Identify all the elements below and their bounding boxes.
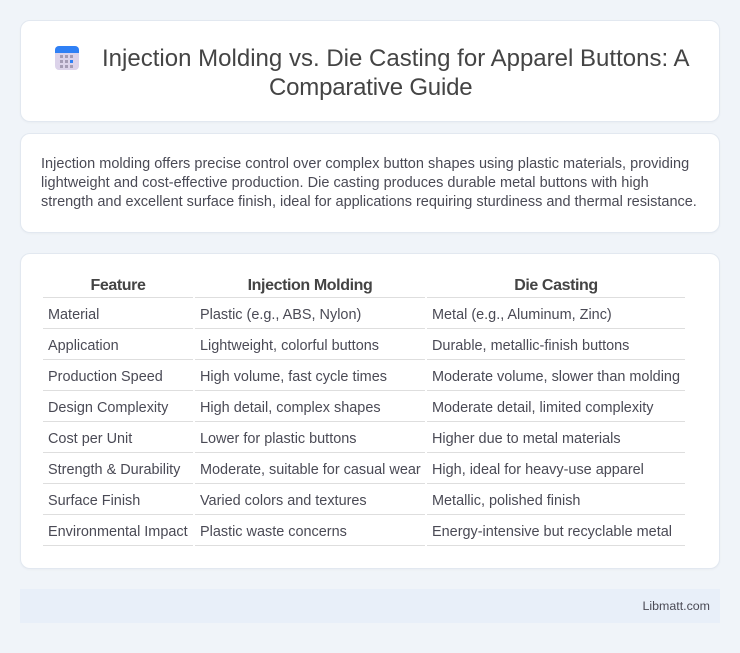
row: Surface Finish: [48, 493, 580, 509]
text: High volume, fast cycle times: [200, 369, 387, 385]
text: Moderate, suitable for casual wear: [200, 462, 421, 478]
intro text: [41, 156, 697, 210]
intro text: strength and excellent surface finish, ideal for applications requiring sturdiness and thermal resistance.: [41, 194, 697, 210]
text: Environmental Impact: [48, 524, 188, 540]
row: Design Complexity: [48, 400, 654, 416]
text: Metal (e.g., Aluminum, Zinc): [432, 307, 612, 323]
column header: Feature: Feature: [90, 277, 146, 294]
text: High detail, complex shapes: [200, 400, 381, 416]
icon: calendar: [55, 46, 79, 70]
text: Varied colors and textures: [200, 493, 367, 509]
row: Application: [48, 338, 629, 354]
text: Application: [48, 338, 119, 354]
text: High, ideal for heavy-use apparel: [432, 462, 644, 478]
text: Metallic, polished finish: [432, 493, 580, 509]
text: Moderate volume, slower than molding: [432, 369, 680, 385]
row: Production Speed: [48, 369, 680, 385]
text: Material: [48, 307, 99, 323]
text: Plastic (e.g., ABS, Nylon): [200, 307, 361, 323]
row: Environmental Impact: [48, 524, 672, 540]
text: Cost per Unit: [48, 431, 132, 447]
text: Strength & Durability: [48, 462, 180, 478]
text: Moderate detail, limited complexity: [432, 400, 653, 416]
text: Production Speed: [48, 369, 163, 385]
panel: intro card: [20, 133, 720, 233]
column header: Die Casting: Die Casting: [514, 277, 598, 294]
title: [102, 45, 690, 101]
text: Higher due to metal materials: [432, 431, 621, 447]
row: Strength and Durability: [48, 462, 644, 478]
table: comparison: [43, 277, 685, 546]
text: Durable, metallic-finish buttons: [432, 338, 629, 354]
panel: table card: [20, 253, 720, 569]
row: Cost per Unit: [48, 431, 621, 447]
column header: Injection Molding: Injection Molding: [248, 277, 372, 294]
intro text: lightweight and cost-effective production. Die casting produces durable metal buttons with high: [41, 175, 649, 191]
text: Surface Finish: [48, 493, 140, 509]
row: Material: [48, 307, 612, 323]
text: Plastic waste concerns: [200, 524, 347, 540]
text: Energy-intensive but recyclable metal: [432, 524, 672, 540]
footer bar: [20, 589, 720, 623]
panel: header card: [20, 20, 720, 122]
text: Lightweight, colorful buttons: [200, 338, 379, 354]
intro text: Injection molding offers precise control over complex button shapes using plastic materials, providing: [41, 156, 689, 172]
title: Injection Molding vs. Die Casting for Apparel Buttons: A: [102, 45, 690, 72]
text: Lower for plastic buttons: [200, 431, 356, 447]
text: Design Complexity: [48, 400, 168, 416]
footer text: Libmatt.com: [643, 599, 710, 613]
title: Comparative Guide: [269, 74, 472, 101]
